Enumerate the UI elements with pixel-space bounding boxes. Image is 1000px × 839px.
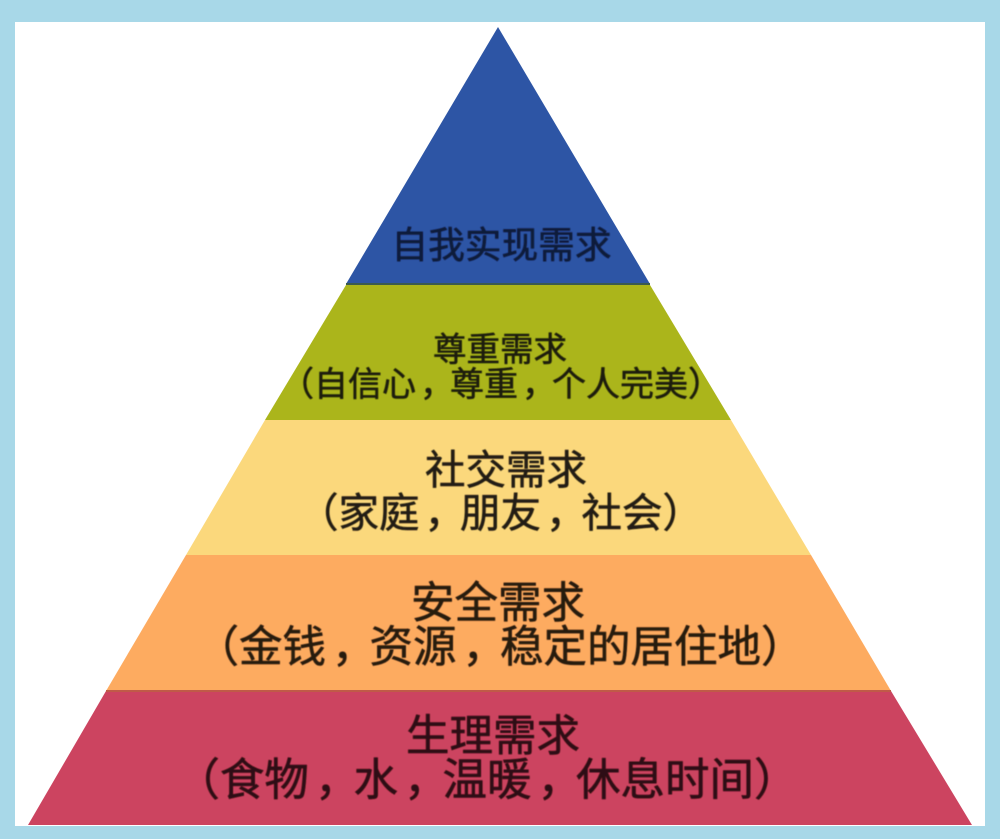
- tier: esteem: （自信心，尊重，个人完美）: [280, 366, 722, 404]
- tier: physiological: 生理需求: [406, 713, 580, 761]
- tier: self-actualization: 自我实现需求: [391, 225, 612, 266]
- tier: safety: （金钱，资源，稳定的居住地）: [196, 624, 804, 672]
- tier: safety: 安全需求: [411, 580, 585, 628]
- tier: social: 社交需求: [425, 447, 587, 493]
- tier: esteem: [265, 285, 731, 420]
- tier: safety: [106, 555, 891, 691]
- tier: social: [186, 420, 811, 555]
- tier: physiological: [28, 690, 972, 825]
- tier: social: （家庭，朋友，社会）: [298, 490, 703, 536]
- tier: self-actualization: [346, 27, 650, 285]
- tier: physiological: （食物，水，温暖，休息时间）: [175, 756, 799, 805]
- tier: esteem: 尊重需求: [433, 332, 567, 369]
